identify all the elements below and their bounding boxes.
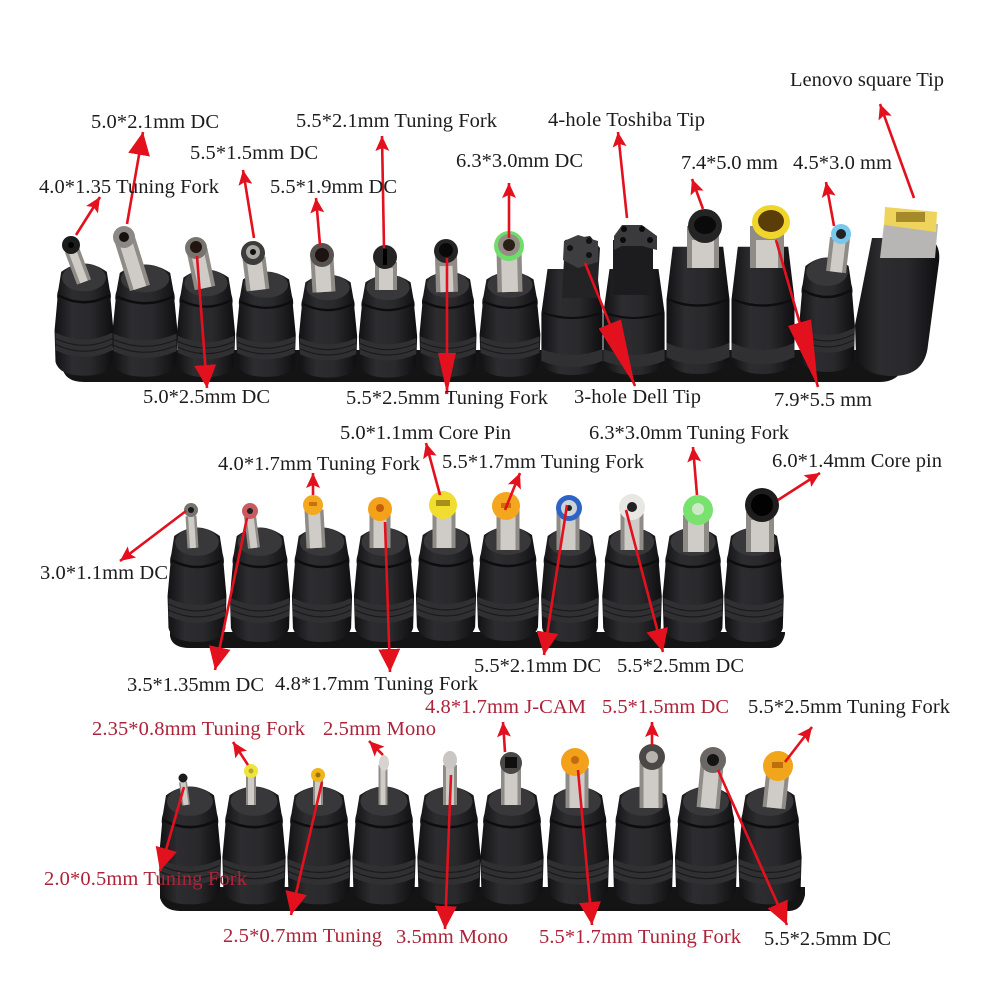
label: 3-hole Dell Tip xyxy=(574,386,701,408)
connector 4.8*1.7 J-CAM xyxy=(480,752,544,904)
label: 7.9*5.5 mm xyxy=(774,389,872,411)
arrow to 5.5*2.1 xyxy=(544,505,567,655)
arrow to 4.8*1.7 xyxy=(385,522,390,672)
arrow to Lenovo tip xyxy=(880,104,914,198)
connector 3.0*1.1 xyxy=(168,503,226,642)
connector 4.5*3.0 blue xyxy=(799,224,855,372)
arrow to 3.0*1.1 xyxy=(120,511,186,561)
label: 4.0*1.7mm Tuning Fork xyxy=(218,453,421,475)
arrow to 5.5*2.1 fork xyxy=(382,136,384,248)
label: 5.5*2.5mm Tuning Fork xyxy=(748,696,951,718)
connector 6.3*3.0 green xyxy=(663,495,723,642)
label: 5.5*2.1mm Tuning Fork xyxy=(296,110,498,132)
arrow to 2.35*0.8 xyxy=(233,742,248,765)
row 3: connectors xyxy=(159,744,802,904)
connector 3.5mm mono xyxy=(417,751,481,904)
connector 4.8*1.7 xyxy=(354,497,414,642)
connector 5.0*2.1 xyxy=(112,226,178,377)
arrow to 3.5*1.35 xyxy=(215,518,247,670)
row 2: connectors xyxy=(168,488,784,642)
row 3: connector tray xyxy=(160,887,805,911)
label: 5.5*1.7mm Tuning Fork xyxy=(539,926,742,948)
connector 5.5*2.5 xyxy=(675,747,737,904)
label: Lenovo square Tip xyxy=(790,69,944,91)
arrow to Toshiba tip xyxy=(618,132,627,218)
arrows: row 1 xyxy=(76,104,914,394)
arrow to 5.0*1.1 xyxy=(426,443,440,495)
connector 5.5*1.5 xyxy=(613,744,673,904)
connector 3-hole Dell tip xyxy=(541,235,603,375)
arrow to 6.3*3.0 fork xyxy=(693,447,697,495)
arrow to 5.5*1.9 xyxy=(316,198,320,245)
labels: row 3 xyxy=(44,696,951,950)
label: 2.0*0.5mm Tuning Fork xyxy=(44,868,248,890)
connector 5.5*1.9 xyxy=(299,243,357,378)
connector 6.0*1.4 xyxy=(724,488,784,642)
connector 5.5*1.7 xyxy=(477,492,539,641)
label: 3.0*1.1mm DC xyxy=(40,562,168,584)
label: 2.35*0.8mm Tuning Fork xyxy=(92,718,306,740)
connector 3.5*1.35 xyxy=(230,503,290,642)
arrow to 2.5*0.7 xyxy=(291,782,322,915)
connector 5.5*2.5 white xyxy=(602,494,662,642)
connector 7.9*5.5 yellow xyxy=(732,205,794,374)
arrow to 4.8*1.7 J-CAM xyxy=(503,722,505,752)
arrow to 4.5*3.0 xyxy=(826,182,834,226)
label: 7.4*5.0 mm xyxy=(681,152,778,174)
arrow to 5.5*1.7 xyxy=(578,770,592,925)
label: 6.0*1.4mm Core pin xyxy=(772,450,942,472)
connector 5.5*2.5 fork xyxy=(419,239,477,377)
arrow to 5.5*2.5 xyxy=(718,770,787,925)
arrow to 5.0*2.1 xyxy=(127,132,143,224)
connector 6.3*3.0 green xyxy=(480,231,540,377)
label: 6.3*3.0mm DC xyxy=(456,150,583,172)
arrow to 5.0*2.5 xyxy=(197,256,207,388)
arrow to 6.3*3.0 xyxy=(508,183,510,238)
arrows: row 3 xyxy=(160,722,812,929)
label: 4.5*3.0 mm xyxy=(793,152,892,174)
arrow to 6.0*1.4 xyxy=(778,473,820,500)
label: 6.3*3.0mm Tuning Fork xyxy=(589,422,790,444)
connector 2.0*0.5 xyxy=(159,774,221,904)
arrow to 4.0*1.35 xyxy=(76,197,100,235)
arrow to 7.4*5.0 xyxy=(692,179,703,209)
arrows: row 2 xyxy=(120,443,820,672)
labels: row 2 xyxy=(40,422,942,696)
arrow to 5.5*1.7 xyxy=(505,473,520,510)
connector 2.5*0.7 xyxy=(287,768,351,904)
label: 4-hole Toshiba Tip xyxy=(548,109,705,131)
label: 4.8*1.7mm J-CAM xyxy=(425,696,586,718)
label: 5.5*2.5mm Tuning Fork xyxy=(346,387,549,409)
connector 7.4*5.0 xyxy=(666,209,730,374)
label: 5.0*1.1mm Core Pin xyxy=(340,422,511,444)
label: 5.5*1.5mm DC xyxy=(602,696,729,718)
connector 4.0*1.35 xyxy=(55,236,113,376)
label: 5.5*2.5mm DC xyxy=(764,928,891,950)
arrow to 5.5*1.5 xyxy=(243,170,254,238)
label: 5.5*1.9mm DC xyxy=(270,176,397,198)
labels: row 1 xyxy=(39,69,944,411)
arrow to Dell tip xyxy=(585,263,635,386)
connector 5.5*2.5 fork xyxy=(738,751,802,904)
arrow to 5.5*2.5 fork xyxy=(785,727,812,762)
connector 5.5*1.5 xyxy=(236,241,296,377)
connector 2.35*0.8 xyxy=(222,764,286,904)
arrow to 3.5mm mono xyxy=(445,775,451,929)
row 2: connector tray xyxy=(170,632,785,648)
row 1: connector tray xyxy=(62,350,906,382)
connector 5.0*2.5 xyxy=(177,237,235,377)
arrow to 2.0*0.5 xyxy=(160,787,184,871)
connector 5.0*1.1 xyxy=(416,491,476,641)
label: 2.5*0.7mm Tuning xyxy=(223,925,382,947)
label: 4.8*1.7mm Tuning Fork xyxy=(275,673,479,695)
connector Lenovo square tip xyxy=(855,207,939,376)
connector 4-hole Toshiba tip xyxy=(603,225,665,375)
connector 2.5mm mono xyxy=(352,755,416,904)
label: 3.5mm Mono xyxy=(396,926,508,948)
label: 5.5*2.5mm DC xyxy=(617,655,744,677)
label: 3.5*1.35mm DC xyxy=(127,674,264,696)
arrow to 7.9*5.5 xyxy=(776,240,818,387)
arrow to 5.5*1.5 xyxy=(651,722,653,745)
connector 5.5*2.1 blue xyxy=(541,495,599,642)
arrow to 2.5mm mono xyxy=(369,741,383,755)
connector 4.0*1.7 xyxy=(292,495,352,642)
arrow to 5.5*2.5 xyxy=(626,510,663,652)
label: 5.5*2.1mm DC xyxy=(474,655,601,677)
arrow to 4.0*1.7 xyxy=(312,473,314,495)
arrow to 5.5*2.5 fork xyxy=(446,258,448,394)
connector 5.5*1.7 xyxy=(547,748,609,904)
label: 5.5*1.5mm DC xyxy=(190,142,318,164)
label: 5.0*2.1mm DC xyxy=(91,111,219,133)
label: 5.5*1.7mm Tuning Fork xyxy=(442,451,645,473)
connector 5.5*2.1 xyxy=(359,245,417,378)
label: 2.5mm Mono xyxy=(323,718,436,740)
label: 5.0*2.5mm DC xyxy=(143,386,270,408)
label: 4.0*1.35 Tuning Fork xyxy=(39,176,220,198)
row 1: connectors xyxy=(55,205,939,378)
